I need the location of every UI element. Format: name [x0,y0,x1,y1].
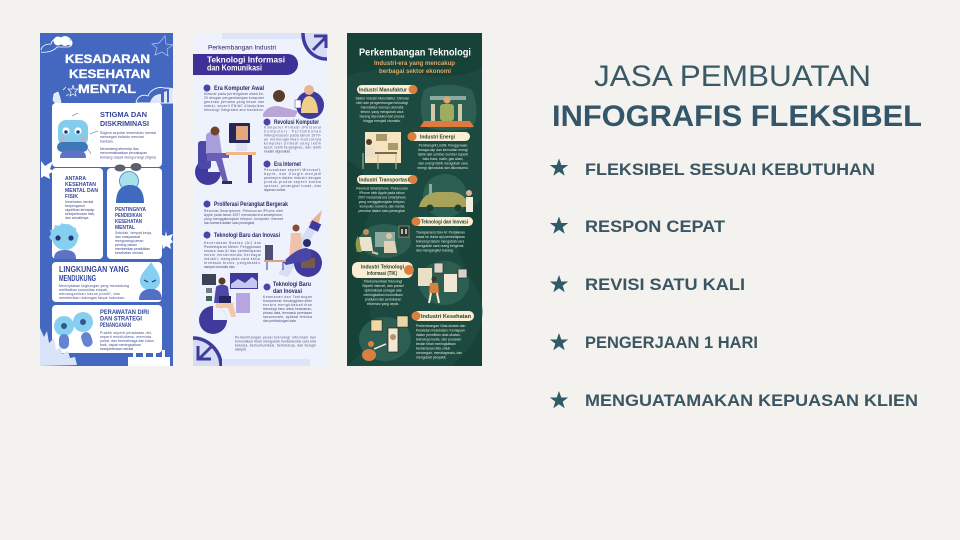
illustration: man at desk with computer [195,123,256,185]
section: teknologi dan inovasi: Teknologi dan Inovasi [421,220,468,226]
heading: jasa pembuatan: JASA PEMBUATAN [594,60,871,93]
text: teknologi baru kedua body: ransomware, aplikasi terbuka [263,315,312,319]
item: fleksibel sesuai kebutuhan: FLEKSIBEL SESUAI KEBUTUHAN [585,161,875,179]
text: stigma body: menormalisasikan percakapan [100,151,147,155]
heading: lingkungan yang mendukung [59,265,129,283]
text: closing paragraph: bekerja, berkomunikasi, berbelanja, dan belajar [235,344,317,348]
title: KESEHATAN [69,67,150,81]
text: perawatan body [99,331,154,351]
text: teknologi baru kedua body: teknologi baru untuk keamanan, [263,307,312,311]
text: transportasi body: yang menggabungkan telepon, [359,200,405,204]
text: energi body: tenaga uap dan kemudian energi [418,148,468,152]
heading: antara kesehatan mental dan fisik: FISIK [65,194,78,200]
icon: mascot with dark clouds [114,163,144,203]
icon: fence plants bottom right [128,349,170,366]
text: lingkungan body: memberikan dukungan tanpa hukuman. [59,296,125,300]
illustration: woman with data cards [418,261,469,305]
heading: pentingnya pendidikan: PENTINGNYA [115,207,147,213]
text: proliferasi body [204,209,283,225]
text: revolusi body: an memungkinkan munculnya [264,138,321,142]
illustration: woman and man with dashboards [199,273,258,334]
text: kesehatan body: mengobati penyakit. [416,356,446,360]
text: kesehatan body: teknologi medis, dan prosedur [416,338,462,342]
text: stigma body: tentang dapat mengurangi stigma [100,156,156,160]
text: manufaktur body: Sektor Industri Manufaktur: Dimulai [356,96,409,100]
section: proliferasi perangkat bergerak: Proliferasi Perangkat Bergerak [214,201,288,208]
text: manufaktur body: barang diproduksi dari proses [360,114,405,118]
illustration: office worker at desk [363,132,401,169]
icon: cloud doodle right of title [136,87,173,103]
text: era internet body: operasi, perangkat lunak, dan [264,184,321,188]
text: teknologi baru body: sampai otomatis dan. [204,265,235,269]
text: teknologi baru kedua body: Kompetensi: Kecanggihan siber [263,299,313,303]
text: era komputer body: 20 dengan pengembangan komputer [204,96,265,100]
text: pentingnya body [115,231,152,255]
text: tik body: Telekomunikasi Teknologi [364,280,402,284]
text: antara body: kesejahteraan fisik, [65,212,95,216]
card: perawatan diri dan strategi penanganan [52,305,162,353]
text: era internet body: Perusahaan seperti Microsoft, [264,168,321,172]
section: teknologi baru dan inovasi kedua: dan Inovasi [273,288,302,295]
decorative darker waves [347,33,482,366]
section: revolusi komputer: Revolusi Komputer [274,119,319,126]
text: tik body: Seperti internet, dan ponsel [362,284,404,288]
text: kesehatan body [416,324,466,360]
text: teknologi baru body: industri, mengubah cara kerja, [204,257,261,261]
text: teknologi baru kedua body: secara mengkhawatirkan [263,303,312,307]
text: antara body: Kesehatan mental [65,200,93,204]
text: proliferasi body: yang menggabungkan telepon, komputer, internet [204,217,283,221]
icon: plants bottom left [40,328,77,366]
text: perawatan body: baik, dapat meningkatkan [100,343,141,347]
text: perawatan body: kesejahteraan mental. [100,347,134,351]
heading: antara kesehatan mental dan fisik: MENTAL DAN [65,188,98,194]
text: inovasi body: masa ke dunia api pembelajaran [416,235,465,239]
section: teknologi baru dan inovasi [204,232,280,269]
text: closing paragraph: Perkembangan pesat teknologi informasi dan [235,336,316,340]
heading: perawatan diri: PERAWATAN DIRI [100,310,149,316]
item: respon cepat: RESPON CEPAT [585,218,725,236]
section: era komputer awal: Era Komputer Awal [214,85,264,92]
text: proliferasi body: Apple pada tahun 2007 menandai era smartphone, [204,213,283,217]
title: KESADARAN [65,52,150,66]
section: industri manufaktur: Industri Manufaktur [359,88,407,94]
text: perawatan body: Praktik seperti perawatan diri, [100,331,152,335]
text: teknologi baru body: secara luas AI dan pembelajaran [204,249,261,253]
text: pentingnya body: Sekolah, tempat kerja, [115,231,152,235]
text: perawatan body: jurnal, dan berolahraga dan fokus [99,339,154,343]
decorative band top [222,33,302,39]
section: industri teknologi informasi [352,262,414,306]
icon: star left edge [41,161,54,179]
text: energi body: energi diproduksi dan dikonsumsi. [417,166,469,170]
text: transportasi body [356,186,408,213]
icon: doodle sparkles [53,85,78,104]
text: tik body: meningkatkan komunikasi [363,293,403,297]
section: industri kesehatan: Industri Kesehatan [421,314,471,320]
card: stigma dan diskriminasi [52,103,162,167]
item: pengerjaan 1 hari: PENGERJAAN 1 HARI [585,334,758,352]
section: era internet: Era Internet [274,161,302,168]
text: tik body: optimalisasi sebagai alat [365,288,402,292]
heading: perawatan diri: PENANGANAN [100,323,131,329]
subtitle: berbagai sektor ekonomi [379,69,451,75]
subtitle: Industri-era yang mencakup [374,61,455,67]
icon: fluffy blue mascot [49,223,79,259]
text: proliferasi body: dan kamera dalam satu perangkat. [204,221,255,225]
text: stigma body [100,131,156,160]
section: era komputer awal [204,84,265,112]
heading: stigma dan diskriminasi [100,110,149,128]
text: energi body: dan energi listrik mengubah cara [418,162,468,166]
card: lingkungan yang mendukung [52,262,162,302]
text: proliferasi body: Revolusi Smartphone: Peluncuran iPhone oleh [204,209,283,213]
text: transportasi body: 2007 menandai era smartphone [358,196,406,200]
text: transportasi body: pemutar dalam satu perangkat. [359,209,406,213]
banner: teknologi informasi dan komunikasi: Teknologi Informasi [207,56,285,64]
illustration: vehicle with mechanic [419,174,473,218]
text: antara body [65,200,95,220]
text: kesehatan body: Peralatan Kesehatan: Kemajuan [416,328,465,332]
text: era internet body [264,168,321,192]
banner: teknologi informasi dan komunikasi [193,54,298,75]
text: inovasi body: Transparansi Dan AI: Perjalanan [416,230,465,234]
title [65,52,150,96]
text: revolusi body: mudah digunakan. [264,150,291,154]
text: antara body: dan sebaliknya. [65,216,89,220]
heading: pentingnya pendidikan: MENTAL [115,225,135,231]
text: transportasi body: komputer, kamera, dan media [360,204,405,208]
heading: pentingnya pendidikan [115,207,147,231]
text: stigma body: mencegah individu mencari [100,135,144,139]
text: tik body [362,280,404,306]
heading: pentingnya pendidikan: KESEHATAN [115,219,142,225]
text: lingkungan body: melibatkan komunitas empati, [59,288,108,292]
text: era komputer body [204,92,265,112]
section: teknologi baru dan inovasi kedua: Teknologi Baru [273,281,311,288]
text: transportasi body: Revolusi Smartphone: Peluncuran [356,186,408,190]
heading: pentingnya pendidikan: PENDIDIKAN [115,213,142,219]
text: inovasi body [416,230,465,252]
text: era internet body: pemimpin dalam industri dengan [264,176,321,180]
section: teknologi dan inovasi [412,217,473,252]
icon: cloud doodle top left [41,36,72,52]
item: revisi satu kali: REVISI SATU KALI [585,276,745,294]
text: teknologi baru kedua body: privasi data, termasuk peretasan [263,311,312,315]
text: teknologi baru kedua body: dan perlindungan data. [263,319,297,323]
text: kesehatan body: mencegah, mendiagnosis, dan [416,351,462,355]
text: pentingnya body: dan masyarakat [115,235,140,239]
heading: stigma dan diskriminasi: STIGMA DAN [100,110,147,119]
text: revolusi body: mikroprosesor pada tahun 1970- [264,134,321,138]
text: era komputer body: teknologi integrated and transistor. [204,108,264,112]
title: MENTAL [78,82,136,96]
section: industri teknologi informasi: Industri Teknologi [361,264,405,270]
text: revolusi body [264,126,321,154]
text: era internet body: Apple, dan Google menjadi [264,172,321,176]
section: industri manufaktur [356,85,418,123]
text: manufaktur body: hingga menjadi otomatis. [363,119,401,123]
text: kesehatan body: kemampuan kita untuk [416,346,450,350]
icon: star doodle top right [152,36,173,56]
text: perawatan body: seperti mindfulness, meminta [100,335,151,339]
text: manufaktur body: terkini, yang mengubah cara [361,110,404,114]
text: era komputer body: mahal, seperti ENIAC dilanjutkan [204,104,264,108]
heading: stigma dan diskriminasi: DISKRIMINASI [100,119,149,128]
text: manufaktur body: oleh dan pengembangan teknologi [356,101,408,105]
icon: blue mascot with scarf [57,113,98,158]
text: kesehatan body: dalam penelitian obat-obatan, [416,333,461,337]
text: closing paragraph: sampai. [235,348,247,352]
text: manufaktur body: manufaktur menuju otomatis [361,106,404,110]
text: pentingnya body: penting dalam [115,243,137,247]
text: transportasi body: iPhone oleh Apple pada tahun [359,191,405,195]
icon: arrow top right [303,33,327,59]
section: revolusi komputer [264,118,321,154]
banner: teknologi informasi dan komunikasi: dan Komunikasi [207,64,262,72]
icon: arrow bottom left [193,337,222,366]
text: antara body: berpengaruh [65,204,85,208]
heading: perawatan diri [100,310,149,329]
text: revolusi body: komputer pribadi yang lebih [264,142,321,146]
card: pentingnya pendidikan kesehatan mental [107,163,162,259]
text: lingkungan body: Menciptakan lingkungan yang mendukung [59,284,129,288]
text: energi body: Pembangkit Listrik: Penggunaan [419,144,468,148]
text: tik body: produksi dan pertukaran [365,298,401,302]
text: closing paragraph [235,336,317,352]
section: industri energi: Industri Energi [420,134,456,140]
heading: antara kesehatan mental dan fisik [65,176,98,200]
text: revolusi body: Komputer Pribadi (Personal [264,126,321,130]
text: lingkungan body [59,284,129,300]
icon: two blue mascots [54,312,94,349]
text: manufaktur body [356,96,409,123]
section: proliferasi perangkat bergerak [204,200,288,225]
item: menguatamakan kepuasan klien: MENGUATAMAKAN KEPUASAN KLIEN [585,392,918,410]
text: revolusi body: Computer): Pertumbuhan [264,130,321,134]
text: inovasi body: mengubah cara orang bergerak [416,244,464,248]
section: era internet [264,160,321,192]
text: pentingnya body: memberikan pendidikan [115,247,150,251]
text: era komputer body: generasi pertama yang besar dan [204,100,264,104]
panel: perkembangan teknologi infographic [347,33,482,366]
heading: perkembangan industri: Perkembangan Industri [208,44,276,52]
panel: teknologi informasi dan komunikasi infographic [193,33,327,366]
text: closing paragraph: komunikasi telah mengubah fundamental cara kita [235,340,316,344]
icon: droplet mascot [139,262,162,300]
decorative band bottom [222,359,310,366]
text: pentingnya body: mengurangi peran [115,239,143,243]
illustration: factory worker [420,85,476,131]
section: industri energi [408,132,470,170]
section: teknologi baru dan inovasi: Teknologi Baru dan Inovasi [214,232,280,239]
text: stigma body: bantuan. [100,140,114,144]
title: perkembangan teknologi: Perkembangan Teknologi [359,48,471,58]
subtitle [374,61,455,75]
text: revolusi body: kecil, lebih terjangkau, dan lebih [264,146,321,150]
text: pentingnya body: kesehatan mental. [115,251,144,255]
illustration: doctor and patient with screen [356,224,411,258]
text: teknologi baru kedua body [263,295,313,323]
section: industri teknologi informasi: Informasi (TIK) [367,271,397,277]
section: industri kesehatan [412,311,474,360]
text: inovasi body: dan mengangkut barang. [416,248,454,252]
heading: lingkungan yang mendukung: MENDUKUNG [59,274,96,283]
text: teknologi baru body: termasuk bisnis, pengobatan, [204,261,261,265]
heading: infografis fleksibel: INFOGRAFIS FLEKSIBEL [552,100,922,133]
illustration: two people at a screen [263,85,324,119]
text: era komputer body: Dimulai pada pertengahan abad ke- [204,92,264,96]
text: energi body [417,144,469,170]
section: industri transportasi [356,175,418,213]
list: keunggulan layanan [550,158,918,410]
text: teknologi baru body: Pembelajaran Mesin: Penggunaan [204,245,261,249]
text: teknologi baru kedua body: Keamanan dan Tantangan [263,295,312,299]
text: kesehatan body: Perkembangan Obat-obatan dan [416,324,466,328]
text: teknologi baru body: mesin mendominasi berbagai [204,253,261,257]
text: teknologi baru body [204,241,261,269]
text: era internet body: layanan online. [264,188,286,192]
illustration: pen and two people [264,210,322,277]
text: kesehatan body: bedah telah meningkatkan [416,342,456,346]
text: energi body: batu bara, nuklir, gas alam, [423,157,463,161]
text: tik body: informasi yang cepat. [367,302,399,306]
text: antara body: signifikan terhadap [65,208,94,212]
text: teknologi baru body: Kecerdasan Buatan (AI) dan [204,241,261,245]
heading: antara kesehatan mental dan fisik: KESEHATAN [65,182,96,188]
heading: lingkungan yang mendukung: LINGKUNGAN YANG [59,265,129,274]
illustration: healthcare worker with cards [359,316,411,361]
text: lingkungan body: menanganikan kasus positif, dan [59,292,120,296]
panel: kesadaran kesehatan mental infographic [40,33,173,366]
heading: antara kesehatan mental dan fisik: ANTARA [65,176,86,182]
text: stigma body: Menantang stereotip dan [100,147,139,151]
section: industri transportasi: Industri Transportasi [359,178,410,184]
text: energi body: listrik dari sumber-sumber seperti [418,152,468,156]
text: stigma body: Stigma seputar kesehatan mental [100,131,156,135]
heading: perawatan diri: DAN STRATEGI [100,316,142,322]
text: inovasi body: teknologi dalam mengubah cara [416,240,464,244]
text: era internet body: produk-produk seperti sistem [264,180,321,184]
icon: star right [158,231,173,249]
item: respon cepat [550,216,725,236]
card: antara kesehatan mental dan fisik [49,168,103,259]
section: teknologi baru dan inovasi kedua [263,281,313,323]
